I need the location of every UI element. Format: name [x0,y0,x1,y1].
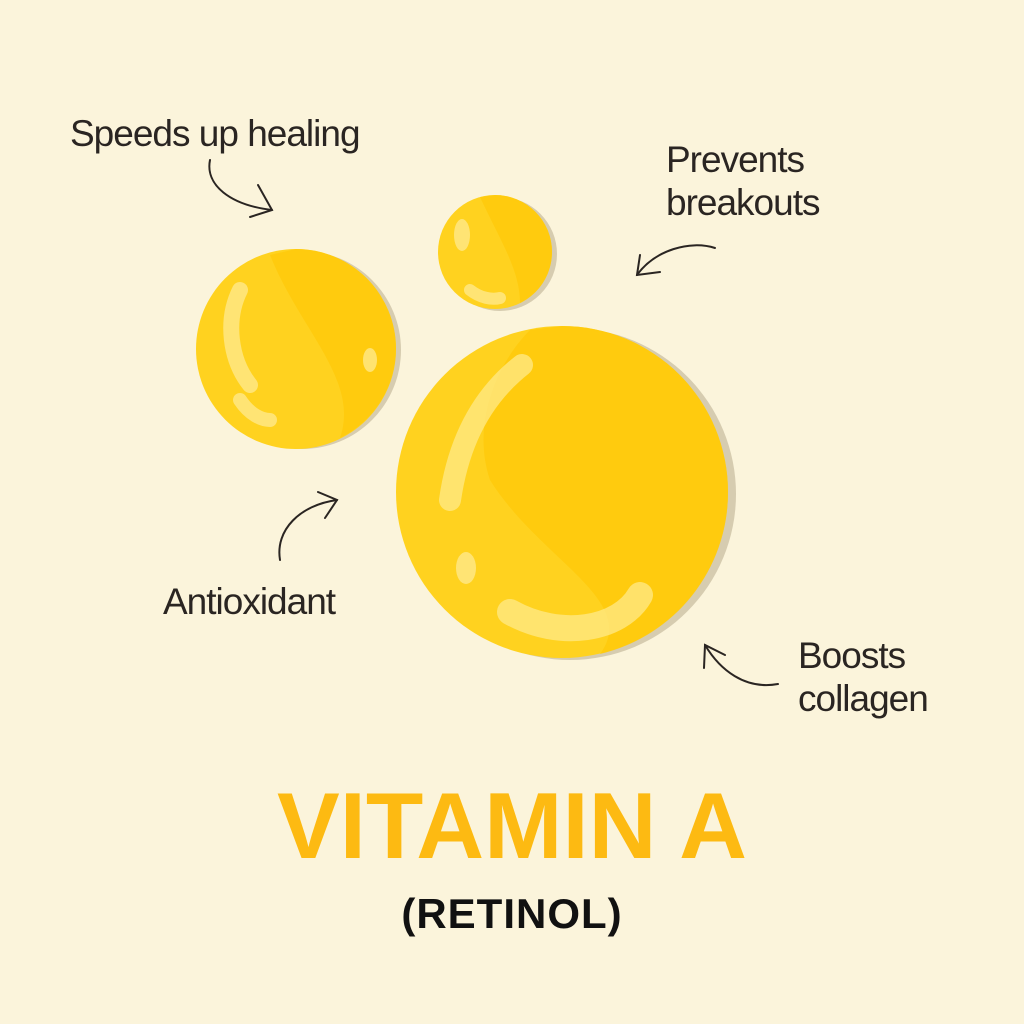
label: boosts collagen: Boosts [798,635,905,676]
title: VITAMIN A [277,773,747,878]
label: prevents breakouts [666,139,820,223]
label: boosts collagen: collagen [798,678,928,719]
droplet: large [396,326,736,660]
arrow: boosts collagen [704,645,778,685]
label: boosts collagen [798,635,928,719]
droplet: medium left [196,249,401,449]
arrow: speeds up healing [209,160,272,217]
arrow: prevents breakouts [637,245,715,275]
label: speeds up healing: Speeds up healing [70,113,360,154]
subtitle: (RETINOL) [401,890,623,937]
arrow: antioxidant [279,492,337,560]
droplet: small top [438,195,557,311]
label: prevents breakouts: breakouts [666,182,820,223]
label: antioxidant: Antioxidant [163,581,335,622]
label: prevents breakouts: Prevents [666,139,804,180]
